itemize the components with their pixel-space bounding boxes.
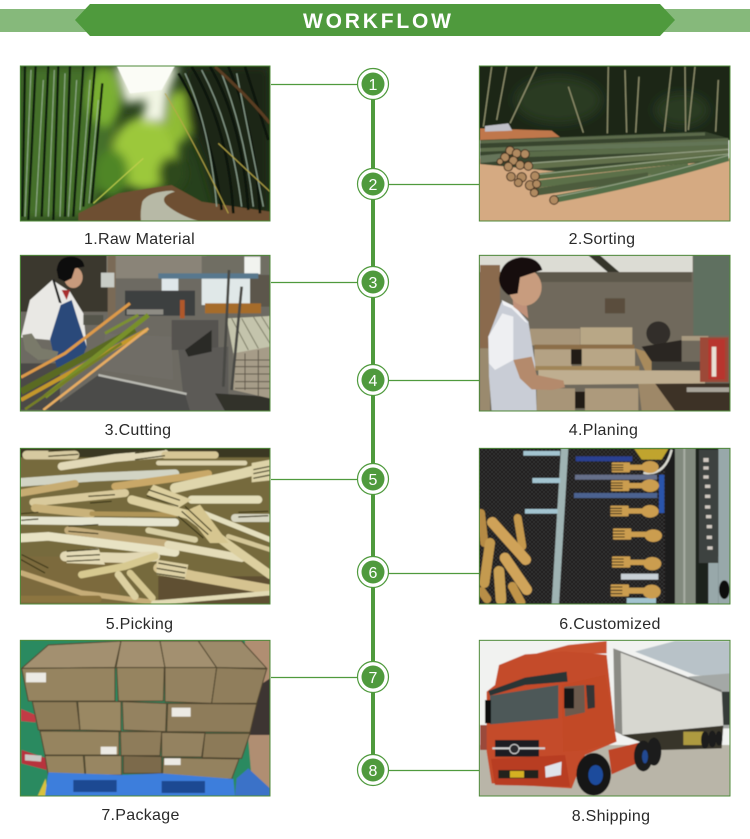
- bamboo stack: [227, 316, 270, 353]
- fender: [608, 742, 641, 774]
- step marker 6: 6: [369, 565, 378, 582]
- machine side: [665, 448, 675, 604]
- worker: [488, 302, 537, 411]
- title banner: WORKFLOW: [303, 10, 451, 33]
- title banner: [0, 4, 750, 36]
- photo 1: bamboo forest: [15, 60, 275, 223]
- photo 4: planing: [475, 250, 735, 413]
- step marker 5: [358, 464, 388, 494]
- label: planing: 4.Planing: [569, 422, 638, 439]
- cut ends: [497, 146, 558, 204]
- fork heads: [147, 485, 192, 508]
- left stems: [22, 66, 102, 220]
- bumper: [491, 755, 570, 787]
- dark machine: [642, 340, 682, 363]
- wheels: [576, 753, 611, 796]
- worker: [20, 280, 88, 346]
- ground and road: [78, 185, 270, 221]
- wood stacks: [530, 329, 580, 345]
- bottom plate: [48, 375, 190, 411]
- red machine: [682, 336, 708, 341]
- photo 6: customized: [475, 443, 735, 606]
- label: raw material: 1.Raw Material: [84, 231, 195, 248]
- right stems: [178, 67, 268, 213]
- guide strips: [552, 448, 568, 604]
- loose sporks: [481, 513, 527, 602]
- building: [635, 641, 730, 678]
- step marker 8: 8: [369, 763, 378, 780]
- step marker 3: [358, 266, 388, 298]
- step marker 2: 2: [369, 177, 378, 194]
- label: cutting: 3.Cutting: [105, 422, 171, 439]
- step marker 5: 5: [369, 472, 378, 489]
- label: sorting: 2.Sorting: [569, 231, 635, 248]
- step marker 3: 3: [369, 275, 378, 292]
- photo 8: shipping truck: [475, 635, 735, 798]
- ground: [479, 745, 730, 797]
- step marker 6: [358, 556, 388, 588]
- right wall: [245, 640, 270, 788]
- spork row: [610, 461, 662, 599]
- floor: [178, 347, 228, 411]
- label: shipping: 8.Shipping: [572, 808, 650, 825]
- step marker 8: [358, 754, 388, 786]
- grille: [495, 740, 539, 757]
- rulers: [576, 456, 632, 461]
- bamboo sticks: [21, 303, 148, 410]
- floor details: [21, 709, 36, 722]
- box labels: [26, 673, 191, 765]
- photo 7: package: [15, 635, 275, 798]
- step marker 4: [358, 364, 388, 396]
- windows: [490, 685, 558, 724]
- photo 5: picking forks: [15, 443, 275, 606]
- fork handles: [20, 454, 270, 603]
- label: package: 7.Package: [101, 807, 180, 824]
- connector lines: [271, 84, 479, 770]
- step marker 7: [358, 662, 388, 692]
- machine: [125, 291, 195, 316]
- label: customized: 6.Customized: [559, 616, 661, 633]
- tines: [21, 450, 270, 578]
- step marker 2: [358, 168, 388, 200]
- forest stems: [483, 67, 718, 133]
- step marker 1: 1: [369, 77, 378, 94]
- boxes: [22, 641, 267, 779]
- label: picking: 5.Picking: [106, 616, 173, 633]
- pallet: [45, 772, 235, 796]
- photo 2: bamboo sorting: [475, 60, 735, 222]
- photo 3: cutting: [15, 250, 275, 413]
- step marker 4: 4: [369, 373, 378, 390]
- sand: [475, 158, 735, 222]
- bamboo poles: [480, 134, 728, 199]
- trailer: [613, 648, 723, 735]
- background: [20, 255, 110, 312]
- plank: [538, 370, 705, 385]
- cab: [518, 641, 607, 658]
- timeline spine: [371, 84, 375, 770]
- step marker 1: [358, 68, 388, 100]
- step marker 7: 7: [369, 670, 378, 687]
